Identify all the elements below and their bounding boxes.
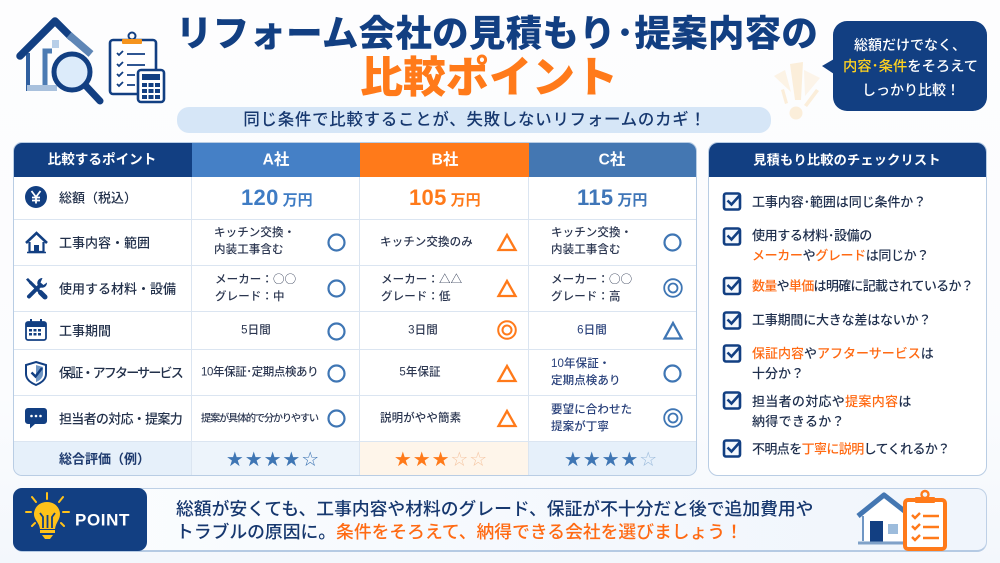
A mark (327, 322, 346, 341)
label: materials: 使用する材料・設備 (59, 282, 176, 296)
table header: C社 (599, 151, 625, 168)
B scope: キッチン交換のみ (380, 236, 473, 248)
summary row background (14, 442, 696, 475)
B mark (496, 408, 518, 428)
check item 7: 不明点を丁寧に説明してくれるか？ (752, 441, 950, 456)
icon: light bulb (25, 491, 71, 543)
icon: house and orange clipboard (855, 491, 950, 553)
icon: house (25, 231, 48, 254)
icon: yen (25, 186, 47, 208)
label: warranty: 保証・アフターサービス (59, 366, 182, 380)
check icons (722, 192, 742, 458)
tagline pill (177, 107, 771, 133)
A period: 5日間 (241, 324, 271, 336)
icon: shield (25, 361, 47, 386)
label: overall rating: 総合評価（例） (59, 452, 150, 466)
B staff: 説明がやや簡素 (380, 412, 461, 424)
label: staff: 担当者の対応・提案力 (59, 412, 182, 426)
C materials: メーカー：○○ グレード：高 (551, 271, 632, 303)
C warranty: 10年保証・ 定期点検あり (551, 358, 621, 387)
C mark (663, 278, 683, 298)
icon: calendar (25, 319, 47, 341)
A warranty: 10年保証･定期点検あり (201, 366, 318, 378)
check item 4: 工事期間に大きな差はないか？ (752, 312, 931, 327)
C stars: ★★★★☆ (564, 447, 658, 471)
B price: 105 万円 (409, 185, 481, 210)
C scope: キッチン交換・ 内装工事含む (551, 227, 632, 256)
checklist header (709, 143, 988, 177)
panel: point bar (13, 488, 987, 552)
icon: tools (26, 278, 48, 300)
check item 5: 保証内容やアフターサービスは 十分か？ (752, 346, 934, 380)
label: period: 工事期間 (59, 324, 111, 338)
label: scope: 工事内容・範囲 (59, 236, 150, 250)
check item 1: 工事内容･範囲は同じ条件か？ (752, 194, 926, 209)
icon: clipboard and calculator (108, 32, 166, 104)
table header: B社 (432, 151, 458, 168)
C mark (663, 233, 682, 252)
callout bubble (822, 21, 987, 111)
B warranty: 5年保証 (399, 366, 441, 378)
point badge (13, 488, 147, 551)
B mark (496, 364, 518, 382)
C mark (663, 364, 682, 383)
check item 6: 担当者の対応や提案内容は 納得できるか？ (752, 394, 912, 428)
icon: faded exclamation (774, 62, 820, 120)
C mark (662, 320, 684, 340)
A mark (327, 364, 346, 383)
table header (14, 143, 696, 177)
C mark (663, 408, 683, 428)
icon: house with magnifier (16, 17, 104, 104)
B mark (496, 278, 518, 298)
A mark (327, 279, 346, 298)
point label: POINT (75, 510, 130, 530)
comparison table (13, 142, 697, 476)
callout bubble: 総額だけでなく、 (854, 37, 966, 53)
label: total: 総額（税込） (59, 190, 137, 206)
icon: chat (25, 408, 47, 428)
C staff: 要望に合わせた 提案が丁寧 (551, 404, 632, 433)
A staff: 提案が具体的で分かりやすい (201, 414, 318, 424)
callout bubble: 内容･条件をそろえて (843, 59, 978, 75)
subtitle: comparison points: 比較ポイント (360, 54, 618, 102)
table header: 比較するポイント (48, 152, 156, 167)
check item 2: 使用する材料･設備の メーカーやグレードは同じか？ (752, 228, 929, 262)
B mark (496, 232, 518, 252)
C period: 6日間 (577, 324, 607, 336)
A price: 120 万円 (241, 185, 313, 210)
B materials: メーカー：△△ グレード：低 (381, 271, 462, 303)
B stars: ★★★☆☆ (394, 447, 488, 471)
A scope: キッチン交換・ 内装工事含む (214, 227, 295, 256)
check item 3: 数量や単価は明確に記載されているか？ (752, 278, 973, 293)
point text: 総額が安くても、工事内容や材料のグレード、保証が不十分だと後で追加費用や トラブルの原因に。条件をそろえて、納得できる会社を選びましょう！ (176, 498, 813, 542)
C price: 115 万円 (577, 185, 647, 210)
A stars: ★★★★☆ (226, 447, 320, 471)
A mark (327, 233, 346, 252)
table header: A社 (263, 151, 289, 168)
A materials: メーカー：○○ グレード：中 (215, 271, 296, 303)
tagline pill: 同じ条件で比較することが、失敗しないリフォームのカギ！ (243, 111, 707, 129)
B period: 3日間 (408, 324, 438, 336)
callout bubble: しっかり比較！ (862, 82, 960, 98)
A mark (327, 409, 346, 428)
row cells (14, 177, 696, 441)
title: リフォーム会社の見積もり･提案内容の (176, 12, 818, 53)
B mark (497, 320, 517, 340)
panel: checklist (708, 142, 987, 476)
checklist header: 見積もり比較のチェックリスト (753, 152, 941, 167)
